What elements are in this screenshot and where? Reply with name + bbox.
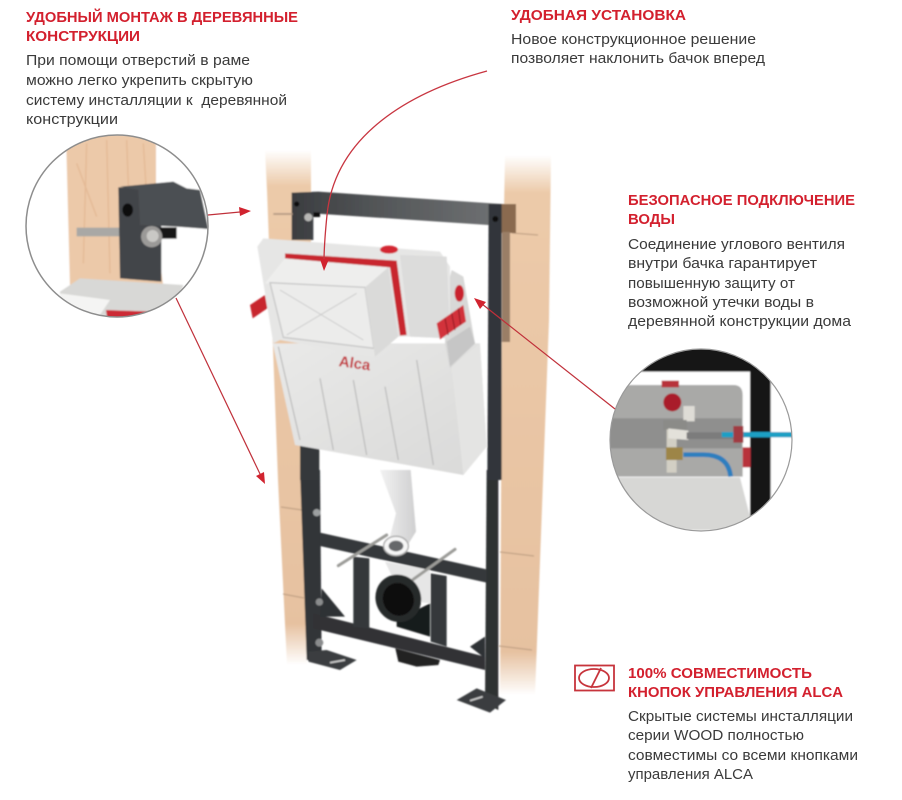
heading: safe water connection bbox=[628, 193, 855, 228]
heading: wooden mount: КОНСТРУКЦИИ bbox=[26, 29, 140, 45]
body: wooden mount: При помощи отверстий в раме bbox=[26, 53, 250, 69]
upper body bbox=[257, 238, 450, 357]
body: button compatibility bbox=[628, 709, 858, 783]
red strip bbox=[285, 253, 407, 336]
foot plates bbox=[308, 650, 357, 670]
waste outlet bbox=[385, 562, 430, 603]
arrow: wood mount to frame top bbox=[208, 207, 251, 216]
arrow: wood mount to lower stud bbox=[176, 298, 265, 484]
cistern with red details and Alca logo bbox=[250, 238, 487, 475]
body: easy installation: позволяет наклонить бачок вперед bbox=[511, 51, 766, 67]
body: button compatibility: серии WOOD полностью bbox=[628, 728, 804, 744]
recessed panel top face bbox=[265, 258, 388, 288]
blue water hoses bbox=[722, 432, 793, 437]
heading: button compatibility: КНОПОК УПРАВЛЕНИЯ ALCA bbox=[628, 685, 844, 701]
stud joints bbox=[281, 233, 538, 650]
heading: button compatibility: 100% СОВМЕСТИМОСТЬ bbox=[628, 666, 812, 682]
heading: safe water connection: ВОДЫ bbox=[628, 212, 675, 228]
threaded rods bbox=[338, 535, 387, 566]
bracket post bbox=[118, 187, 161, 282]
text block: safe water connection bbox=[628, 193, 855, 330]
body: wooden mount bbox=[26, 53, 287, 128]
left wooden stud bbox=[265, 150, 311, 665]
cistern corner bbox=[60, 278, 183, 320]
text block: easy installation bbox=[511, 8, 766, 67]
stud bracket plate bbox=[500, 204, 516, 233]
body: safe water connection: Соединение углового вентиля bbox=[628, 237, 845, 253]
body: button compatibility: Скрытые системы инсталляции bbox=[628, 709, 853, 725]
text block: button compatibility bbox=[628, 666, 858, 783]
body: wooden mount: можно легко укрепить скрытую bbox=[26, 73, 253, 89]
screw bbox=[77, 228, 120, 236]
heading: safe water connection: БЕЗОПАСНОЕ ПОДКЛЮЧЕНИЕ bbox=[628, 193, 855, 209]
body: button compatibility: управления ALCA bbox=[628, 767, 753, 783]
body: wooden mount: конструкции bbox=[26, 112, 118, 128]
recessed panel front bbox=[270, 283, 374, 348]
circle outline bbox=[26, 135, 208, 317]
lower body bbox=[273, 343, 487, 475]
wood stud bbox=[66, 135, 163, 287]
side compartment bbox=[445, 270, 475, 368]
arrow: water connection bbox=[474, 298, 615, 409]
circle outline bbox=[610, 349, 792, 531]
zoom circle: frame fixed to wooden stud bbox=[25, 134, 209, 318]
drain pipe bbox=[380, 470, 416, 547]
body: safe water connection: деревянной конструкции дома bbox=[628, 314, 852, 330]
black frame bbox=[641, 350, 762, 373]
bracket bar bbox=[120, 182, 208, 229]
heading: wooden mount bbox=[26, 8, 298, 45]
body: safe water connection: повышенную защиту от bbox=[628, 276, 795, 292]
body: wooden mount: систему инсталляции к деревянной bbox=[26, 93, 287, 109]
frame: upper bar and posts bbox=[273, 192, 502, 480]
heading: easy installation: УДОБНАЯ УСТАНОВКА bbox=[511, 8, 687, 24]
logo: Alca bbox=[338, 353, 372, 374]
arrow: easy installation curve bbox=[320, 71, 487, 271]
right wooden stud bbox=[500, 155, 551, 695]
body: easy installation: Новое конструкционное решение bbox=[511, 32, 756, 48]
body: safe water connection: возможной утечки воды в bbox=[628, 295, 814, 311]
cistern lower body bbox=[608, 477, 750, 530]
cistern interior bbox=[608, 385, 743, 477]
zoom circle: water connection inside cistern bbox=[609, 348, 793, 532]
frame: lower bars and mounting details bbox=[300, 470, 506, 713]
heading: button compatibility bbox=[628, 666, 844, 701]
body: easy installation bbox=[511, 32, 766, 67]
icon: flush button bbox=[575, 666, 614, 690]
heading: wooden mount: УДОБНЫЙ МОНТАЖ В ДЕРЕВЯННЫЕ bbox=[26, 8, 298, 26]
illustration: installation frame on wooden studs bbox=[250, 150, 551, 713]
text block: wooden mount bbox=[26, 8, 298, 128]
body: safe water connection bbox=[628, 237, 852, 330]
body: safe water connection: внутри бачка гарантирует bbox=[628, 256, 817, 272]
body: button compatibility: совместимы со всеми кнопками bbox=[628, 748, 858, 764]
